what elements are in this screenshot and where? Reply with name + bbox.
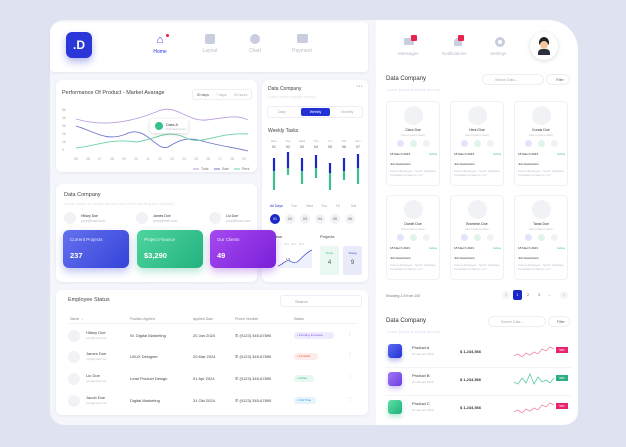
- day selector: 05: [333, 217, 337, 221]
- tooltip: [150, 119, 188, 133]
- right top icons: Messages: [398, 51, 419, 56]
- projects boxes: Done: [326, 251, 333, 255]
- table header: Status: [294, 317, 304, 321]
- person cards grid: Clara Doe: [405, 128, 421, 132]
- nav: chart: Chart: [249, 48, 261, 54]
- table rows: [68, 330, 352, 407]
- person cards grid: Consultant at Starvex, CO: [454, 267, 486, 271]
- product rows: [386, 344, 572, 420]
- bar chart: 02: [286, 145, 290, 149]
- product rows: 20 Januari 2020: [412, 380, 434, 384]
- header nav card: [50, 22, 368, 72]
- right top icons: [398, 35, 506, 56]
- line chart: 12: [158, 157, 162, 161]
- table rows: ⋮: [348, 331, 352, 336]
- search: Search: [295, 299, 308, 304]
- person cards grid: lorem ipsum dolor: [465, 133, 489, 137]
- main left area: [50, 20, 376, 425]
- person cards grid: Active: [493, 246, 501, 250]
- day selector: [270, 204, 356, 224]
- heading: Data Company: [386, 76, 426, 82]
- stat card: project finance: $3,290: [144, 251, 167, 260]
- person cards grid: Current Employee - Senior Solutions: [390, 263, 435, 267]
- product rows: Product C: [412, 401, 430, 406]
- day selector: 04: [318, 217, 322, 221]
- line chart: 3k: [62, 124, 66, 128]
- day selector: Wed: [306, 204, 313, 208]
- person cards grid: Daniel Doe: [404, 222, 422, 226]
- person cards grid: 18 March 2023: [454, 246, 474, 250]
- person cards grid: Current Employee - Senior Solutions: [454, 263, 499, 267]
- person cards grid: Job Description: [454, 162, 475, 166]
- product rows: Product A: [412, 345, 429, 350]
- person cards grid: Current Employee - Senior Solutions: [390, 169, 435, 173]
- table rows: Liu Doe: [86, 373, 100, 378]
- person cards grid: 18 March 2023: [390, 152, 410, 156]
- line chart: 10: [134, 157, 138, 161]
- range buttons: [192, 89, 252, 100]
- table rows: ⋮: [348, 374, 352, 379]
- heading: Data Company: [64, 192, 101, 198]
- pagination: Showing 1-5 from 100: [386, 294, 420, 298]
- person cards grid: Job Description: [390, 162, 411, 166]
- table rows: Jacob Doe: [86, 395, 105, 400]
- progress mini chart: Oct Nov Dec: [284, 242, 304, 246]
- stat card: current projects: 237: [70, 251, 83, 260]
- person cards grid: Job Description: [518, 256, 539, 260]
- progress mini chart: [266, 234, 312, 268]
- line chart: 05: [74, 157, 78, 161]
- bar chart: Fri: [328, 139, 332, 143]
- panel: data company cards: Lorem Ipsum is simply dummy: [386, 87, 440, 92]
- tabs: Daily: [278, 110, 286, 114]
- icon: settings: [495, 37, 505, 47]
- icon: messages: [404, 38, 414, 45]
- line chart: 4k: [62, 116, 66, 120]
- line chart: 0: [62, 148, 64, 152]
- person cards grid: Consultant at Starvex, CO: [390, 267, 422, 271]
- bar chart: Sun: [355, 139, 361, 143]
- line chart: Total: [201, 167, 209, 171]
- panel: data company cards: ...: [548, 293, 551, 297]
- table rows: 20 Jan 2024: [193, 333, 215, 338]
- day selector: 02: [288, 217, 292, 221]
- person cards grid: Tania Doe: [533, 222, 549, 226]
- range buttons: 7 days: [216, 92, 226, 96]
- product rows: 20 Januari 2020: [412, 352, 434, 356]
- panel: employee status: [56, 290, 368, 415]
- weekly tasks title: Weekly Tasks: [268, 128, 298, 134]
- line chart: 5k: [62, 108, 66, 112]
- avatar: user: [530, 32, 558, 60]
- line chart: 14: [182, 157, 186, 161]
- search & filter: Search Data ...: [495, 78, 518, 82]
- stat card: our clients: [210, 230, 276, 268]
- logo: [66, 32, 92, 58]
- panel: data company cards: 3: [538, 293, 540, 297]
- person cards grid: Henri Doe: [469, 128, 485, 132]
- line chart: 07: [98, 157, 102, 161]
- day selector: 06: [348, 217, 352, 221]
- table rows: Lead Product Design: [130, 376, 167, 381]
- panel: data company cards: [386, 74, 570, 300]
- line chart: 13: [170, 157, 174, 161]
- panel: weekly tasks: Lorem Ipsum is simply dummy: [268, 95, 315, 99]
- table rows: • Contract: [297, 354, 310, 358]
- heading: Employee Status: [68, 297, 110, 303]
- table rows: your@mail.com: [86, 379, 107, 383]
- stat card: our clients: 49: [217, 251, 225, 260]
- nav: payment: Payment: [292, 48, 312, 54]
- projects boxes: 9: [351, 260, 354, 266]
- logo: .D: [73, 38, 85, 52]
- people row: [64, 212, 250, 224]
- heading: Performance Of Product - Market Avarage: [62, 90, 165, 96]
- panel: products: [386, 316, 572, 420]
- people row: James Doe: [153, 214, 171, 218]
- table header: Position Applied: [130, 317, 155, 321]
- right top icons: Settings: [490, 51, 506, 56]
- person cards grid: Consultant at Starvex, CO: [518, 173, 550, 177]
- panel: data company cards: 2: [527, 293, 529, 297]
- line chart: 08: [110, 157, 114, 161]
- table rows: 31 Okt 2024: [193, 398, 215, 403]
- progress mini chart: Progress: [266, 234, 282, 239]
- stat card: current projects: Current Projects: [70, 237, 103, 242]
- people row: your@mail.com: [153, 219, 177, 223]
- table header: Name ↓: [70, 317, 83, 321]
- line chart: 15: [194, 157, 198, 161]
- table rows: your@mail.com: [86, 401, 107, 405]
- bar chart: 03: [300, 145, 304, 149]
- nav: home: ⌂: [157, 34, 163, 46]
- product rows: 58%: [559, 376, 565, 380]
- line chart: 18: [230, 157, 234, 161]
- product rows: $ 1,234,566: [460, 405, 481, 410]
- nav: layout: [202, 34, 218, 54]
- range buttons: 30 days: [197, 92, 209, 96]
- tabs: [267, 106, 363, 118]
- table rows: James Doe: [86, 351, 106, 356]
- panel: data company cards: Filter: [556, 78, 564, 82]
- people row: your@mail.com: [81, 219, 105, 223]
- person cards grid: 18 March 2023: [518, 152, 538, 156]
- bar chart: 06: [342, 145, 346, 149]
- day selector: Fri: [336, 204, 340, 208]
- person cards grid: Bramesh Doe: [466, 222, 488, 226]
- bar chart: Thu: [313, 139, 319, 143]
- table rows: ✆ (0123) 345-67890: [235, 333, 271, 338]
- table rows: 01 Apr 2024: [193, 376, 215, 381]
- line chart: 11: [146, 157, 150, 161]
- day selector: Tue: [291, 204, 297, 208]
- search & filter: [482, 74, 544, 85]
- line chart: Rent: [242, 167, 249, 171]
- table rows: ✆ (0123) 345-67890: [235, 398, 271, 403]
- panel: performance chart: [56, 80, 257, 172]
- people row: your@mail.com: [226, 219, 250, 223]
- person cards grid: Active: [557, 152, 565, 156]
- table rows: Hillary Doe: [86, 330, 106, 335]
- projects boxes: Projects: [320, 234, 334, 239]
- person cards grid: Job Description: [390, 256, 411, 260]
- person cards grid: Current Employee - Senior Solutions: [518, 169, 563, 173]
- table rows: • Full Time: [297, 398, 311, 402]
- day selector: Sat: [351, 204, 356, 208]
- table header: [68, 316, 358, 324]
- person cards grid: lorem ipsum dolor: [465, 227, 489, 231]
- icon: notifications: [454, 38, 462, 46]
- person cards grid: Active: [429, 246, 437, 250]
- table rows: Sr. Digital Marketing: [130, 333, 166, 338]
- person cards grid: 18 March 2023: [390, 246, 410, 250]
- person cards grid: Kurais Doe: [532, 128, 550, 132]
- table header: Phone Number: [235, 317, 259, 321]
- stat card: our clients: Our Clients: [217, 237, 240, 242]
- person cards grid: 18 March 2023: [454, 152, 474, 156]
- person cards grid: Current Employee - Senior Solutions: [518, 263, 563, 267]
- tabs: Weekly: [310, 110, 321, 114]
- table rows: ⋮: [348, 396, 352, 401]
- bar chart: Sat: [342, 139, 346, 143]
- table rows: your@mail.com: [86, 336, 107, 340]
- right top icons: Notifications: [442, 51, 467, 56]
- person cards grid: lorem ipsum dolor: [529, 227, 553, 231]
- bar chart: Wed: [299, 139, 305, 143]
- table rows: ⋮: [348, 352, 352, 357]
- product rows: Product B: [412, 373, 430, 378]
- heading: Data Company: [386, 318, 426, 324]
- line chart: 1k: [62, 140, 66, 144]
- table header: Applied Date: [193, 317, 213, 321]
- stat card: project finance: [137, 230, 203, 268]
- line chart: [62, 108, 250, 171]
- tabs: Monthly: [341, 110, 353, 114]
- bar chart: 05: [328, 145, 332, 149]
- stat card: current projects: [63, 230, 129, 268]
- product rows: $ 1,234,566: [460, 377, 481, 382]
- range buttons: 24 hours: [234, 92, 247, 96]
- panel: data company people: [56, 184, 257, 282]
- table rows: your@mail.com: [86, 357, 107, 361]
- projects boxes: 4: [328, 260, 331, 266]
- bar chart: 07: [356, 145, 360, 149]
- panel: data company people: Lorem Ipsum is simply dummy text of the printing and industry: [64, 201, 174, 206]
- person cards grid: lorem ipsum dolor: [529, 133, 553, 137]
- nav: payment: [292, 34, 312, 54]
- day selector: All Days: [270, 204, 283, 208]
- panel: weekly tasks: [262, 80, 368, 282]
- panel: weekly tasks: ···: [356, 83, 363, 90]
- nav: layout: Layout: [202, 48, 218, 54]
- person cards grid: 18 March 2023: [518, 246, 538, 250]
- search: [280, 295, 362, 307]
- line chart: Sale: [222, 167, 229, 171]
- product rows: 20 Januari 2020: [412, 408, 434, 412]
- person cards grid: Job Description: [454, 256, 475, 260]
- table rows: • Active: [297, 376, 307, 380]
- person cards grid: [386, 101, 568, 280]
- line chart: 16: [206, 157, 210, 161]
- nav: home: [153, 34, 169, 55]
- person cards grid: lorem ipsum dolor: [401, 227, 425, 231]
- bar chart: 01: [272, 145, 276, 149]
- person cards grid: Consultant at Starvex, CO: [390, 173, 422, 177]
- line chart: 2k: [62, 132, 66, 136]
- person cards grid: Consultant at Starvex, CO: [454, 173, 486, 177]
- people row: Liu Doe: [226, 214, 238, 218]
- nav: chart: [249, 34, 262, 54]
- panel: data company cards: ‹: [505, 293, 507, 297]
- panel: products: Lorem Ipsum is simply dummy: [386, 329, 440, 334]
- person cards grid: Active: [557, 246, 565, 250]
- bar chart: Tue: [285, 139, 291, 143]
- table rows: ✆ (0123) 345-67890: [235, 376, 271, 381]
- person cards grid: lorem ipsum dolor: [401, 133, 425, 137]
- person cards grid: Active: [493, 152, 501, 156]
- table rows: 20 Mar 2024: [193, 354, 215, 359]
- product rows: 58%: [559, 404, 565, 408]
- table rows: • Pending Interview: [297, 333, 323, 337]
- person cards grid: Consultant at Starvex, CO: [518, 267, 550, 271]
- line chart: 17: [218, 157, 222, 161]
- panel: products: Filter: [557, 320, 565, 324]
- table rows: UI/UX Designer: [130, 354, 158, 359]
- day selector: 03: [303, 217, 307, 221]
- heading: Data Company: [268, 86, 301, 92]
- bar chart: 04: [314, 145, 318, 149]
- person cards grid: Active: [429, 152, 437, 156]
- projects boxes: Doing: [349, 251, 356, 255]
- bar chart: Mon: [271, 139, 277, 143]
- product rows: $ 1,234,566: [460, 349, 481, 354]
- line chart: 09: [122, 157, 126, 161]
- day selector: 01: [273, 217, 277, 221]
- tooltip: Pull Description: [166, 127, 187, 131]
- projects boxes: [320, 234, 362, 275]
- progress mini chart: 1.9: [286, 257, 291, 261]
- line chart: 06: [86, 157, 90, 161]
- people row: Hillary Doe: [81, 214, 98, 218]
- bar chart: [271, 139, 361, 190]
- person cards grid: Current Employee - Senior Solutions: [454, 169, 499, 173]
- panel: data company cards: 1: [517, 293, 518, 297]
- product rows: 58%: [559, 348, 565, 352]
- nav: home: Home: [153, 49, 167, 55]
- day selector: Thu: [321, 204, 327, 208]
- tooltip: Data A: [166, 122, 178, 127]
- table rows: Digital Marketing: [130, 398, 160, 403]
- panel: data company cards: ›: [563, 293, 565, 297]
- right panel: [376, 20, 578, 425]
- person cards grid: Job Description: [518, 162, 539, 166]
- table rows: ✆ (0123) 345-67890: [235, 354, 271, 359]
- panel: products: Search Data ...: [501, 320, 524, 324]
- stat card: project finance: Project Finance: [144, 237, 175, 242]
- line chart: 19: [242, 157, 246, 161]
